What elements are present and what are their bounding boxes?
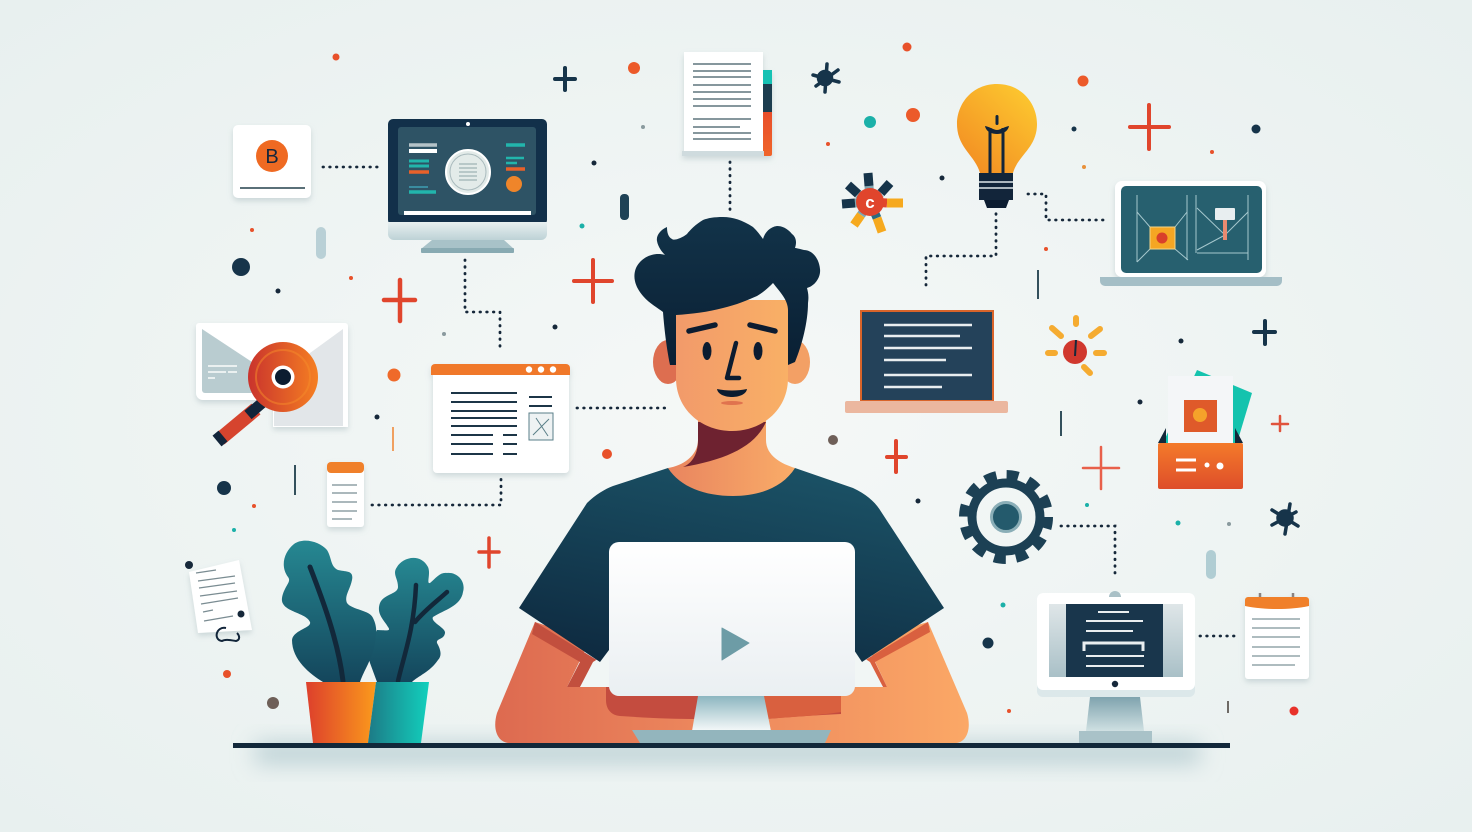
- leaf left: [282, 541, 376, 682]
- light bulb: [957, 84, 1037, 208]
- small monitor bottom-right: [1037, 591, 1195, 744]
- face: [676, 300, 788, 431]
- shadow under computer: [606, 687, 841, 719]
- decorative pills and ticks: [294, 194, 1229, 713]
- arms: [495, 622, 720, 743]
- shirt: [519, 468, 944, 670]
- gear: [965, 476, 1047, 558]
- card: B badge: [233, 125, 311, 198]
- decorative dots: [217, 42, 1298, 716]
- hair: [634, 217, 820, 365]
- document top: [682, 52, 772, 156]
- plus signs: [384, 68, 1288, 567]
- envelope with magnifier: [196, 323, 348, 441]
- laptop top-right: [1100, 181, 1282, 286]
- ears: [653, 340, 683, 384]
- connector lines: [323, 162, 1234, 636]
- card: B badge: B: [265, 146, 279, 168]
- folder with documents: [1158, 370, 1252, 489]
- tilted note with doodle: [185, 560, 252, 641]
- desk shadow: [255, 742, 1200, 764]
- calendar note: [1245, 593, 1309, 679]
- monitor top-left: [388, 119, 547, 253]
- computer in front of person: [609, 542, 855, 743]
- splat icons: [813, 64, 1298, 534]
- gear burst icon: [842, 173, 903, 232]
- neck: [668, 410, 795, 500]
- chalkboard laptop: [845, 311, 1008, 413]
- small note: [327, 462, 364, 527]
- gear burst icon: c: [865, 193, 875, 212]
- desk: [233, 743, 1230, 748]
- plant: [282, 541, 464, 743]
- sun target icon: [1048, 318, 1104, 373]
- browser window: [431, 364, 570, 473]
- face features: [689, 325, 775, 405]
- gap between arms and torso: [580, 650, 612, 687]
- pots: [306, 682, 376, 743]
- leaf right: [369, 558, 464, 682]
- arm shadows: [532, 622, 600, 687]
- person: [495, 217, 969, 743]
